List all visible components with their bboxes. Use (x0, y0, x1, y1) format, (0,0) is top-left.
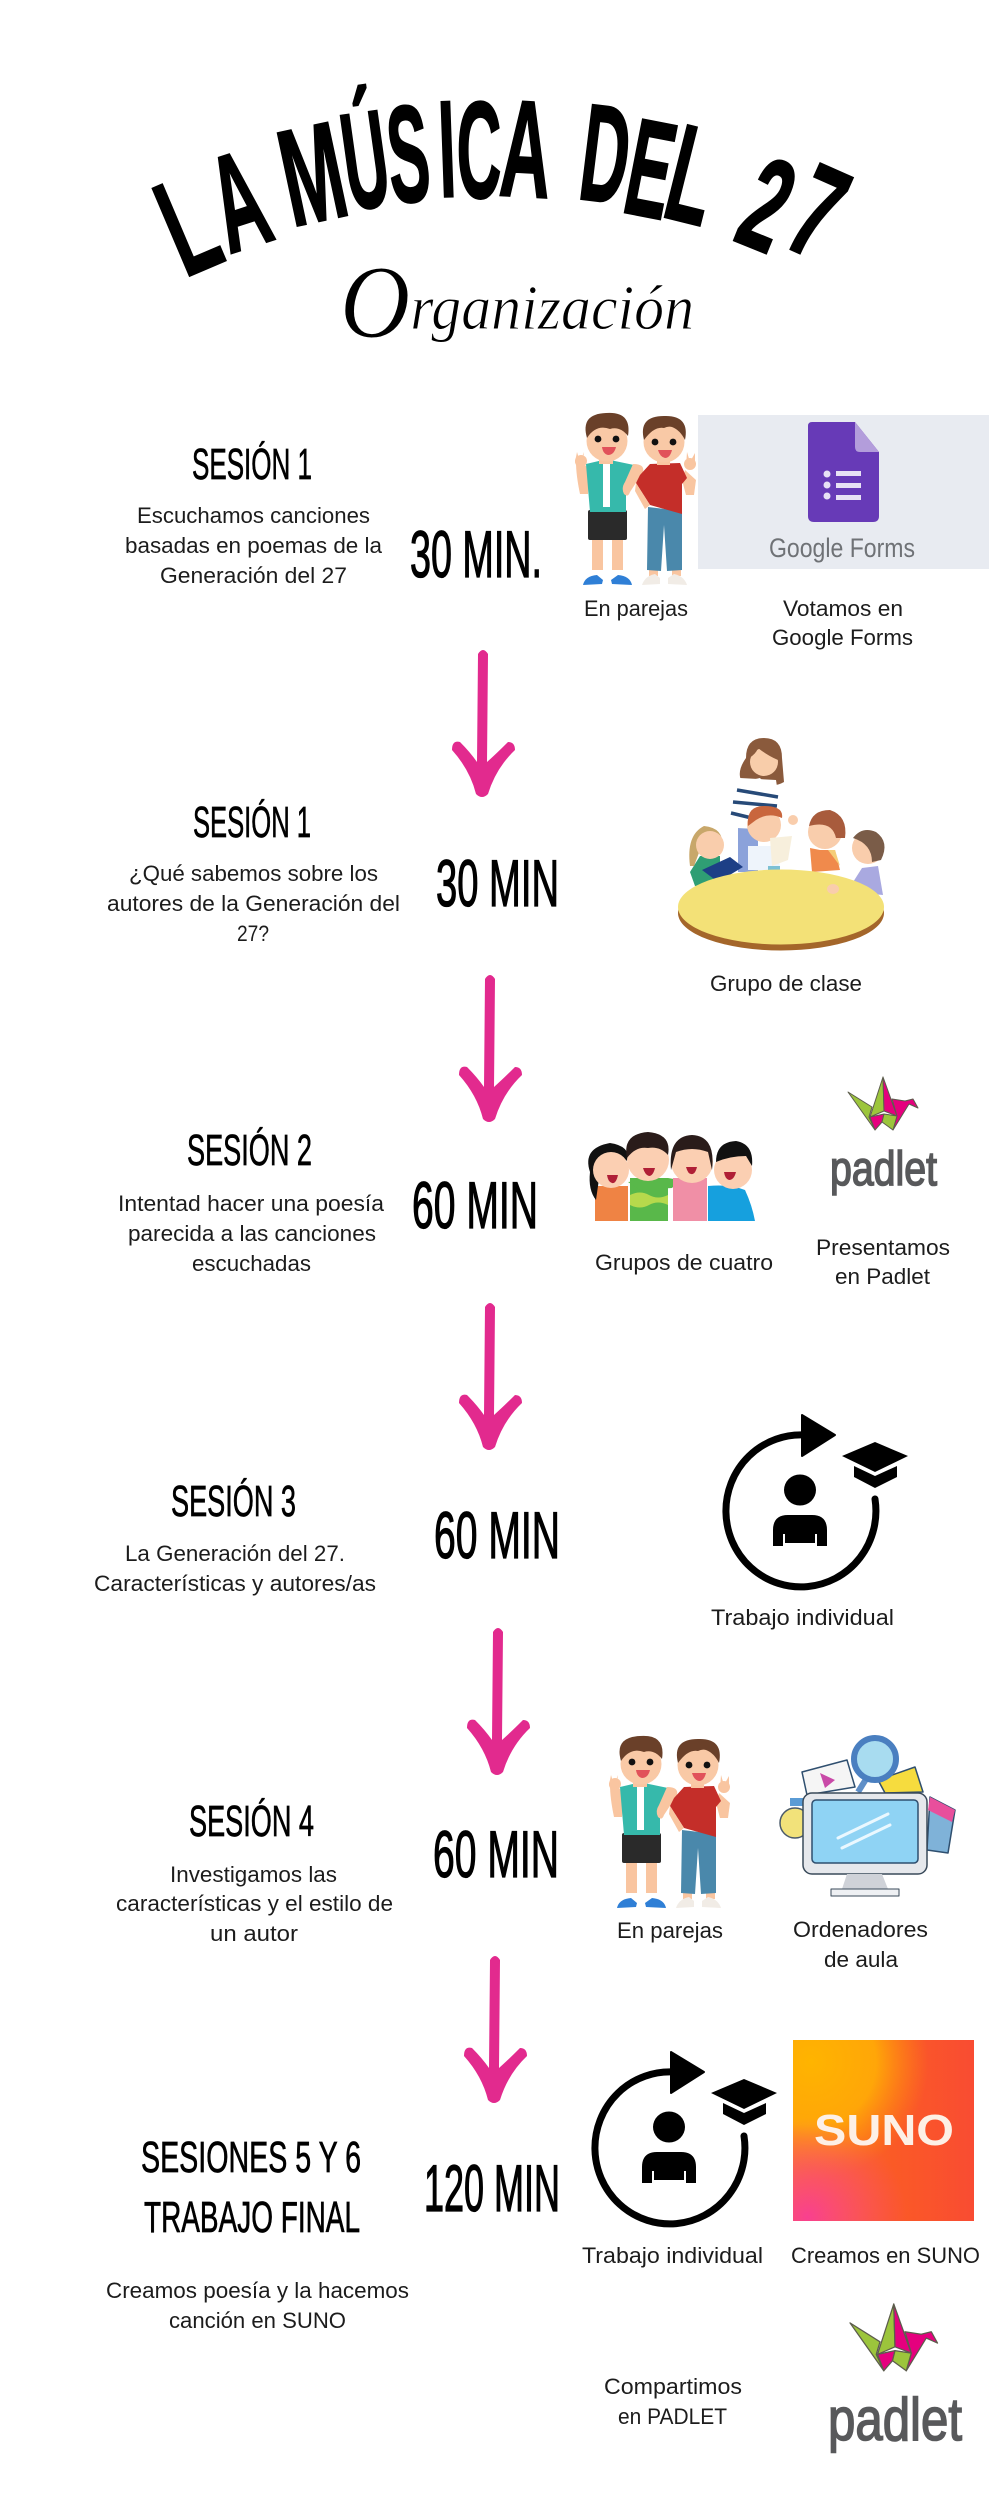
description (107, 861, 400, 946)
label: Trabajo individual: Trabajo individual (711, 1605, 894, 1630)
icon: pair of students (609, 1736, 730, 1908)
icon: teacher and class around a table (678, 738, 885, 950)
description: un autor (210, 1921, 298, 1946)
subtitle: rganización (410, 272, 694, 343)
title: A (191, 121, 287, 283)
description: ¿Qué sabemos sobre los (129, 861, 378, 886)
title: I (436, 71, 458, 227)
session row 5 (116, 1736, 955, 1972)
description (116, 1862, 393, 1946)
description (94, 1541, 376, 1596)
subtitle: O (340, 245, 410, 360)
duration: 60 MIN (434, 1498, 560, 1572)
arrow 4 (467, 1628, 530, 1775)
label: Grupo de clase: Grupo de clase (710, 971, 862, 996)
session row 2 (107, 738, 885, 996)
session row 6 (106, 2040, 980, 2453)
icon: Padlet logo (828, 2304, 962, 2453)
icon: four children hugging (588, 1132, 755, 1221)
icon: individual study cycle (726, 1415, 908, 1587)
label: Trabajo individual: Trabajo individual (582, 2243, 763, 2268)
label: Compartimos en PADLET (604, 2374, 742, 2429)
label: Creamos en SUNO: Creamos en SUNO (791, 2243, 980, 2268)
label: Presentamos en Padlet (816, 1235, 950, 1289)
duration: 30 MIN. (410, 517, 542, 591)
title: D (573, 74, 639, 233)
heading: SESIÓN 1 (193, 798, 311, 847)
duration: 120 MIN (424, 2151, 560, 2225)
title: M (267, 93, 359, 256)
label: Compartimos en PADLET: Compartimos (604, 2374, 742, 2399)
icon: Padlet logo: padlet (828, 2386, 962, 2453)
title (136, 71, 868, 305)
arrow 2 (459, 975, 522, 1122)
session row 4 (94, 1415, 908, 1630)
description: Características y autores/as (94, 1571, 376, 1596)
label: Ordenadores de aula: Ordenadores (793, 1917, 928, 1942)
icon: Google Forms card (698, 415, 989, 569)
description: canción en SUNO (169, 2308, 346, 2333)
duration: 60 MIN (412, 1168, 538, 1242)
session row 3 (118, 1077, 950, 1289)
label: Compartimos en PADLET: en PADLET (618, 2404, 727, 2429)
duration: 30 MIN (436, 846, 559, 920)
label: Ordenadores de aula (793, 1917, 928, 1972)
description: Intentad hacer una poesía (118, 1191, 385, 1216)
icon: individual study cycle (595, 2052, 777, 2224)
title: A (497, 72, 555, 228)
description: características y el estilo de (116, 1891, 393, 1916)
arrow 3 (459, 1303, 522, 1450)
description: escuchadas (192, 1251, 311, 1276)
heading: SESIÓN 3 (171, 1477, 296, 1526)
heading: TRABAJO FINAL (144, 2193, 360, 2242)
label: Votamos en Google Forms: Google Forms (772, 625, 913, 650)
title: 7 (768, 136, 868, 288)
session row 1 (125, 413, 989, 650)
label: En parejas: En parejas (617, 1918, 723, 1943)
description: Investigamos las (170, 1862, 337, 1887)
description: basadas en poemas de la (125, 533, 383, 558)
description: Escuchamos canciones (137, 503, 370, 528)
title: 2 (720, 128, 814, 281)
heading: SESIÓN 2 (187, 1126, 312, 1175)
label: Votamos en Google Forms (772, 596, 913, 650)
description: parecida a las canciones (128, 1221, 376, 1246)
label: Grupos de cuatro: Grupos de cuatro (595, 1250, 773, 1275)
icon: Google Forms card: Google Forms (769, 533, 915, 563)
duration: 60 MIN (433, 1817, 559, 1891)
heading: SESIÓN 4 (189, 1797, 314, 1846)
label: Presentamos en Padlet: Presentamos (816, 1235, 950, 1260)
title: C (457, 73, 501, 227)
description: Generación del 27 (160, 563, 347, 588)
heading: SESIÓN 1 (192, 440, 312, 489)
description (106, 2278, 409, 2333)
description: autores de la Generación del (107, 891, 400, 916)
description (125, 503, 383, 588)
icon: Padlet logo: padlet (830, 1143, 937, 1196)
title: Ú (332, 80, 398, 240)
icon: pair of students (575, 413, 696, 585)
icon: classroom computer (780, 1738, 955, 1896)
description (118, 1191, 385, 1276)
label: En parejas: En parejas (584, 596, 688, 621)
label: Ordenadores de aula: de aula (824, 1947, 899, 1972)
label: Votamos en Google Forms: Votamos en (783, 596, 903, 621)
icon: Padlet logo (830, 1077, 937, 1196)
arrow 5 (464, 1956, 527, 2103)
label: Presentamos en Padlet: en Padlet (835, 1264, 930, 1289)
title: S (381, 75, 436, 233)
title: L (136, 145, 240, 305)
icon: SUNO logo: SUNO (814, 2106, 954, 2155)
arrow 1 (452, 650, 515, 797)
description: 27? (237, 921, 269, 946)
heading (141, 2133, 361, 2242)
title: E (614, 89, 687, 249)
description: Creamos poesía y la hacemos (106, 2278, 409, 2303)
heading: SESIONES 5 Y 6 (141, 2133, 361, 2182)
description: La Generación del 27. (125, 1541, 345, 1566)
title: L (652, 95, 732, 256)
icon: SUNO logo (793, 2040, 974, 2221)
